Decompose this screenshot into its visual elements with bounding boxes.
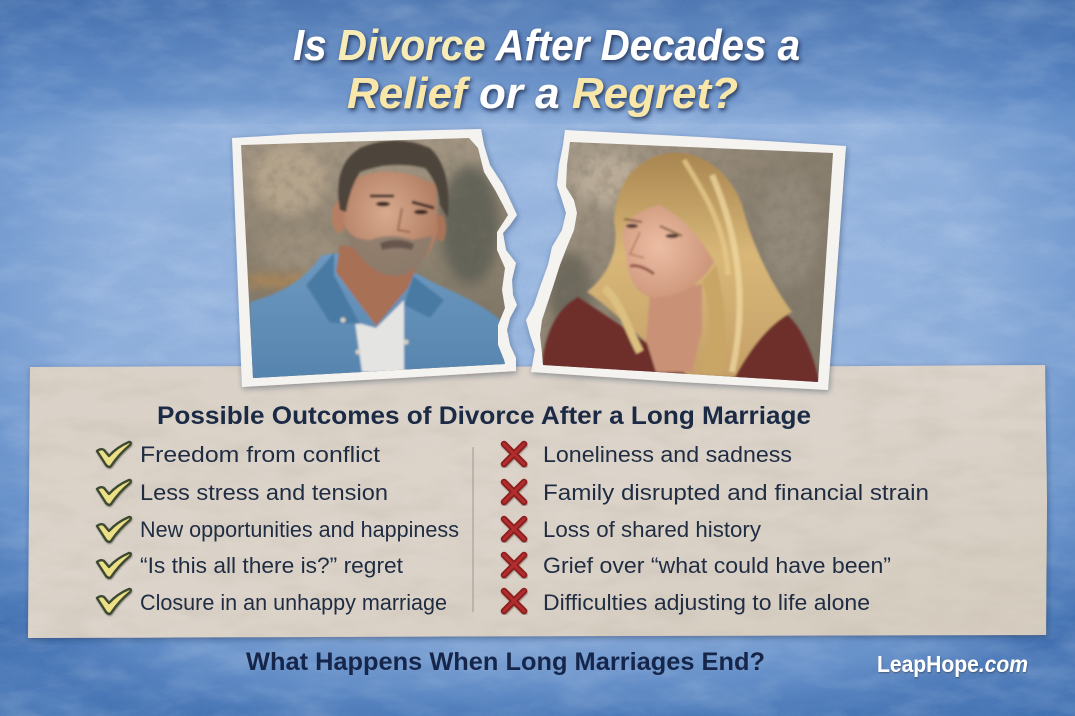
torn photo: woman bbox=[526, 130, 846, 390]
list: positive outcomes bbox=[97, 442, 459, 615]
shirt buttons bbox=[340, 317, 346, 323]
collars bbox=[306, 253, 360, 324]
column divider bbox=[472, 447, 474, 612]
item: new opportunities: New opportunities and happiness bbox=[140, 517, 459, 542]
hair lock over shoulder bbox=[702, 266, 724, 326]
panel: possible outcomes bbox=[25, 360, 1050, 642]
sweater bbox=[542, 297, 820, 385]
item: loneliness: Loneliness and sadness bbox=[543, 442, 792, 467]
item: closure: Closure in an unhappy marriage bbox=[140, 590, 447, 615]
eyes and brows bbox=[370, 196, 434, 208]
title: Is Divorce After Decades a bbox=[293, 21, 800, 70]
title: Relief or a Regret? bbox=[347, 69, 738, 118]
item: family disrupted: Family disrupted and financial strain bbox=[543, 480, 929, 505]
item: freedom from conflict: Freedom from conflict bbox=[140, 442, 380, 467]
beard bbox=[344, 226, 432, 276]
face bbox=[622, 205, 714, 298]
ears bbox=[332, 201, 346, 233]
hair bbox=[338, 140, 449, 218]
hair back bbox=[587, 153, 792, 377]
item: difficulties: Difficulties adjusting to life alone bbox=[543, 590, 870, 615]
item: is this all there is: “Is this all there is?” regret bbox=[140, 553, 403, 578]
item: grief: Grief over “what could have been” bbox=[543, 553, 891, 578]
list: negative outcomes bbox=[504, 442, 929, 615]
title bbox=[293, 21, 800, 118]
face bbox=[344, 171, 438, 262]
item: less stress: Less stress and tension bbox=[140, 480, 388, 505]
mouth bbox=[630, 266, 654, 274]
panel heading: Possible Outcomes of Divorce After a Long Marriage bbox=[157, 402, 811, 430]
torn photo: man bbox=[232, 129, 517, 387]
eyes bbox=[624, 219, 682, 236]
footer question: What Happens When Long Marriages End? bbox=[246, 648, 765, 676]
brand logo: LeapHope.com bbox=[877, 651, 1028, 677]
neck and chest bbox=[646, 284, 702, 372]
t-shirt bbox=[355, 300, 404, 372]
shirt bbox=[250, 253, 510, 385]
neck bbox=[336, 245, 420, 326]
item: loss of shared history: Loss of shared history bbox=[543, 517, 761, 542]
